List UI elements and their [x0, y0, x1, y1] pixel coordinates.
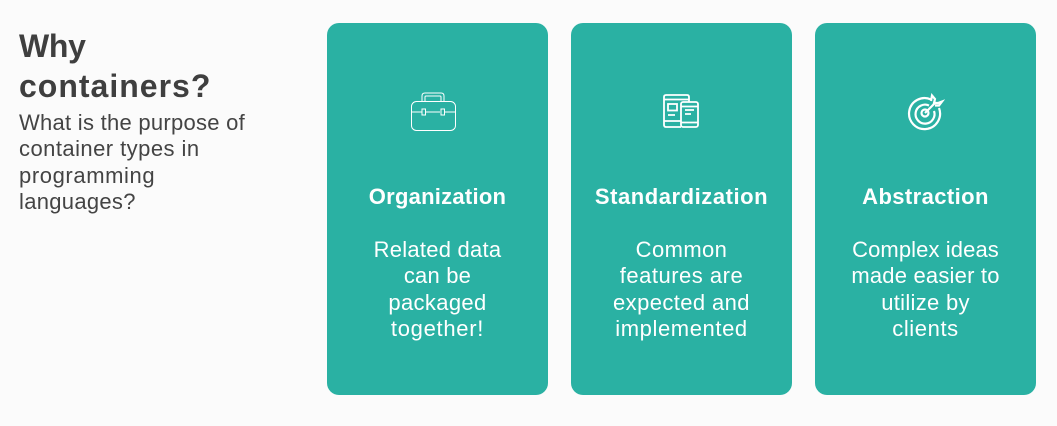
card text: Related data — [374, 237, 501, 262]
card text: can be — [404, 263, 471, 288]
intro text: container types in — [19, 136, 200, 161]
intro text: languages? — [19, 189, 136, 214]
card text — [851, 237, 1000, 341]
icon: target — [908, 93, 945, 130]
panel: standardization — [571, 23, 792, 395]
intro text: programming — [19, 163, 155, 188]
card text: utilize by — [881, 290, 970, 315]
card text: Common — [636, 237, 727, 262]
card text: implemented — [615, 316, 748, 341]
card text: packaged — [388, 290, 487, 315]
card text — [613, 237, 750, 341]
card title: Standardization — [595, 184, 768, 209]
panel: abstraction — [815, 23, 1036, 395]
card text: together! — [391, 316, 484, 341]
card text: clients — [892, 316, 959, 341]
heading — [19, 28, 211, 104]
card text — [374, 237, 502, 341]
heading: Why — [19, 28, 86, 64]
card text: Complex ideas — [852, 237, 999, 262]
panel: organization — [327, 23, 548, 395]
intro text — [19, 110, 245, 214]
icon: documents — [663, 94, 699, 128]
card title: Organization — [369, 184, 506, 209]
card text: expected and — [613, 290, 750, 315]
card title: Abstraction — [862, 184, 989, 209]
heading: containers? — [19, 68, 211, 104]
card text: made easier to — [851, 263, 1000, 288]
intro text: What is the purpose of — [19, 110, 245, 135]
card text: features are — [620, 263, 743, 288]
icon: briefcase — [411, 92, 456, 131]
